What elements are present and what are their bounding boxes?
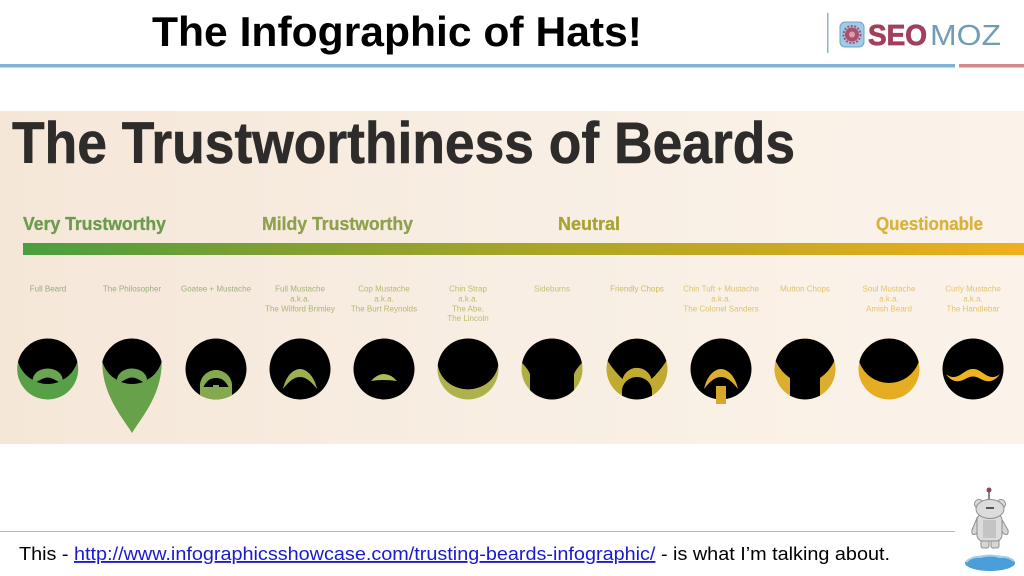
beard name labels: a.k.a.: [711, 294, 731, 304]
icon: soul mustache: [858, 338, 920, 400]
slide title: The Infographic of Hats!: [152, 8, 642, 55]
icon: mutton chops: [774, 338, 836, 400]
logo: SEOmoz: SEO: [868, 20, 927, 52]
logo: SEOmoz: [827, 13, 1001, 53]
beard name labels: Sideburns: [534, 284, 570, 294]
beard name labels: Chin Strap: [449, 284, 487, 294]
beard name labels: Cop Mustache: [358, 284, 410, 294]
beard name labels: Soul Mustache: [863, 284, 916, 294]
beard name labels: Chin Tuft + Mustache: [683, 284, 759, 294]
beard name labels: a.k.a.: [374, 294, 394, 304]
beard name labels: a.k.a.: [879, 294, 899, 304]
beard name labels: a.k.a.: [290, 294, 310, 304]
header rule: [0, 64, 1024, 68]
icon: robot mascot on puddle: [965, 488, 1015, 571]
logo: SEOmoz: MOZ: [930, 20, 1001, 52]
scale category labels: [23, 214, 983, 234]
beard name labels: Full Mustache: [275, 284, 325, 294]
footer text with link: This - http://www.infographicsshowcase.com/trusting-beards-infographic/ - is what I’m talking about.: [19, 543, 890, 564]
icon: chin tuft and mustache: [690, 338, 752, 404]
icon: cop mustache: [354, 338, 414, 400]
footer rule: [0, 531, 955, 532]
icon: full mustache: [270, 338, 330, 400]
beard name labels: Curly Mustache: [945, 284, 1001, 294]
beard name labels: Mutton Chops: [780, 284, 830, 294]
beard name labels: The Handlebar: [947, 304, 1000, 314]
icon: full beard: [17, 338, 78, 400]
scale category labels: Neutral: [558, 214, 620, 234]
beard name labels: Amish Beard: [866, 304, 912, 314]
icon: friendly chops: [606, 338, 668, 400]
panel: trustworthiness of beards: [0, 111, 1024, 444]
beard name labels: The Abe,: [452, 304, 484, 314]
beard name labels: The Colonel Sanders: [683, 304, 759, 314]
trust gradient bar: [23, 243, 1024, 255]
icon: chin strap: [438, 338, 498, 400]
beard name labels: [30, 284, 1001, 323]
beard name labels: a.k.a.: [458, 294, 478, 304]
icon: the philosopher: [102, 338, 162, 433]
scale category labels: Very Trustworthy: [23, 214, 166, 234]
scale category labels: Mildy Trustworthy: [262, 214, 413, 234]
beard name labels: The Philosopher: [103, 284, 161, 294]
icon: sideburns: [522, 338, 582, 400]
panel heading: The Trustworthiness of Beards: [12, 111, 795, 176]
icon: goatee and mustache: [186, 338, 246, 400]
beard name labels: Goatee + Mustache: [181, 284, 252, 294]
scale category labels: Questionable: [876, 214, 983, 234]
beard name labels: a.k.a.: [963, 294, 983, 304]
beard name labels: Friendly Chops: [610, 284, 664, 294]
icon: curly mustache: [942, 338, 1004, 400]
beard name labels: The Burt Reynolds: [351, 304, 417, 314]
beard name labels: The Wilford Brimley: [265, 304, 335, 314]
beard name labels: The Lincoln: [447, 314, 489, 323]
beard name labels: Full Beard: [30, 284, 66, 294]
